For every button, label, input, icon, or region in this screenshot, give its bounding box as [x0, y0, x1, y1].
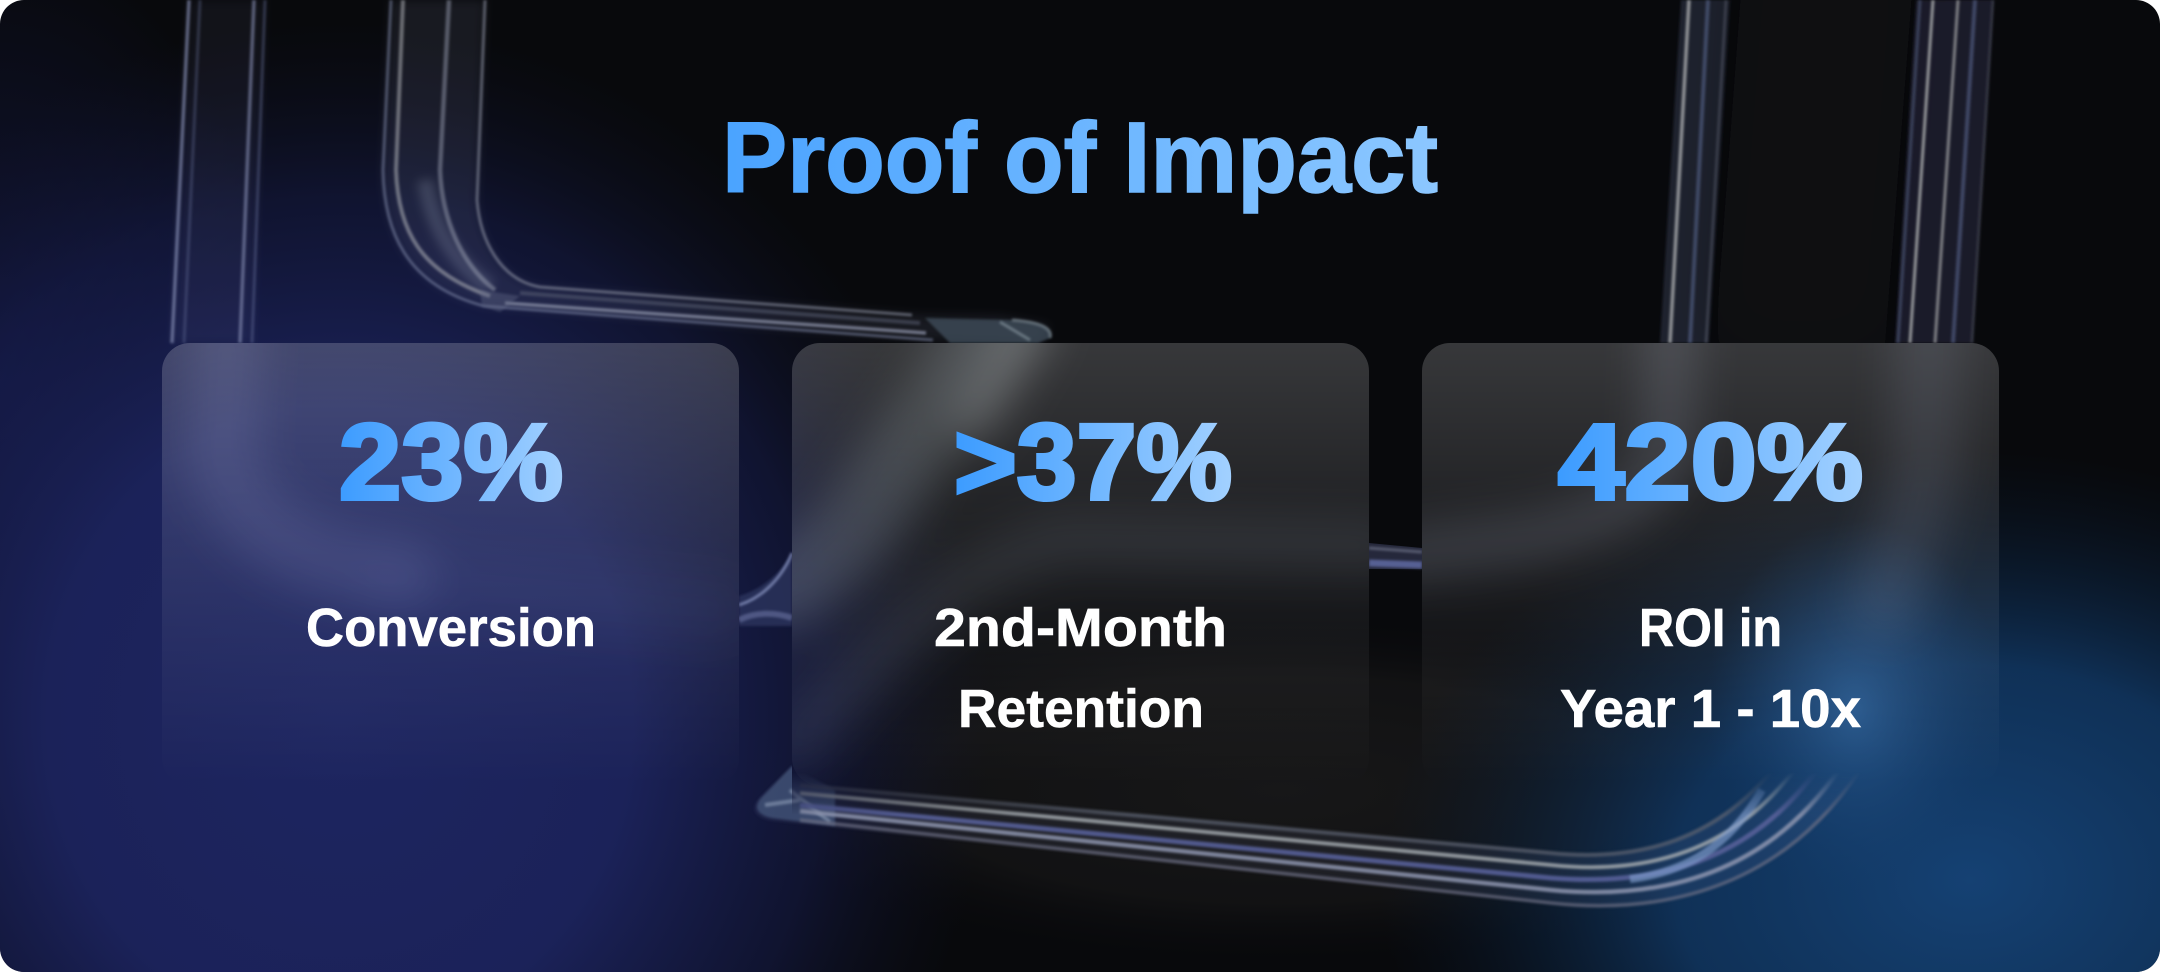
- tube: far left vertical: [172, 0, 265, 343]
- tube: upper left elbow: [383, 0, 1050, 343]
- tube: lower sweep: [754, 760, 1860, 906]
- label: 2nd-month retention: [936, 606, 1224, 728]
- title: Proof of Impact: [722, 102, 1438, 214]
- stat: >37%: >37%: [954, 401, 1232, 522]
- label: roi in year 1: [1560, 606, 1862, 728]
- label: 2nd-month retention: Retention: [958, 679, 1204, 739]
- tube: gap segment between cards one and two: [739, 553, 792, 626]
- stat: 420%: 420%: [1558, 401, 1863, 522]
- tube: gap segment between cards two and three: [1369, 543, 1422, 569]
- haze between right verticals: [1708, 38, 1724, 307]
- label: roi in year 1: ROI in: [1639, 598, 1782, 658]
- panel: roi: [1422, 343, 1999, 728]
- panel: retention: [792, 343, 1369, 768]
- tube: right vertical one: [1660, 0, 1730, 343]
- tube: right vertical two: [1895, 0, 1993, 343]
- stat: 23%: 23%: [339, 401, 563, 522]
- label: 2nd-month retention: 2nd-Month: [934, 598, 1227, 658]
- label: roi in year 1: Year 1 - 10x: [1560, 679, 1861, 739]
- glass tubes: [172, 0, 1993, 626]
- panel: conversion: [162, 343, 739, 684]
- label: conversion: Conversion: [306, 598, 596, 658]
